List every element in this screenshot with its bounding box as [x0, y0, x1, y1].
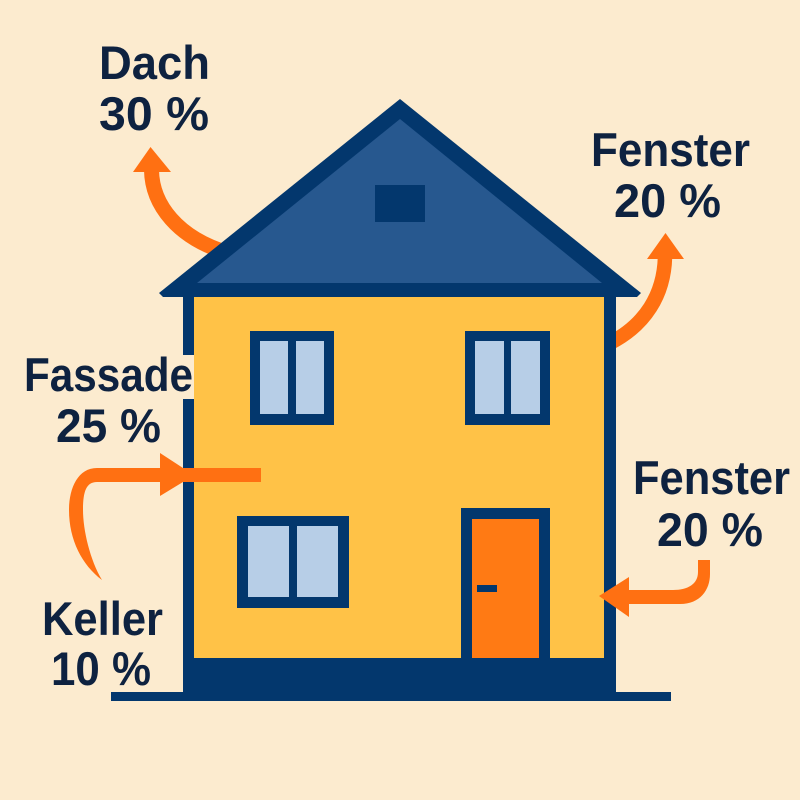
label: upper window	[591, 123, 750, 227]
label: upper window: 20 %	[614, 174, 721, 227]
roof	[159, 99, 641, 297]
label: basement	[42, 592, 163, 695]
label: facade: 25 %	[56, 399, 161, 452]
label: roof: 30 %	[99, 87, 209, 140]
window: upper right	[465, 331, 550, 425]
arrow: roof heat loss	[133, 147, 228, 253]
label: facade	[24, 348, 193, 452]
label: lower window	[633, 451, 790, 556]
label: basement: 10 %	[51, 642, 151, 695]
label: lower window: 20 %	[657, 503, 763, 556]
window: lower left	[237, 516, 349, 608]
label: roof	[99, 36, 210, 140]
label: basement: Keller	[42, 592, 163, 645]
house wall	[183, 290, 616, 662]
roof outline	[159, 99, 641, 297]
label: roof: Dach	[99, 36, 210, 89]
house base	[183, 658, 616, 693]
wall surface	[194, 297, 604, 658]
roof surface	[197, 119, 602, 283]
label: lower window: Fenster	[633, 451, 790, 504]
arrow: lower window heat loss	[599, 560, 710, 617]
arrow: facade heat loss	[69, 453, 261, 580]
label: upper window: Fenster	[591, 123, 750, 176]
ground line	[111, 692, 671, 701]
door	[461, 508, 550, 658]
roof vent	[375, 185, 425, 222]
label: facade: Fassade	[24, 348, 193, 401]
window: upper left	[250, 331, 334, 425]
house	[111, 99, 671, 701]
label background gap in wall	[183, 355, 194, 399]
arrow: upper window heat loss	[610, 233, 684, 343]
